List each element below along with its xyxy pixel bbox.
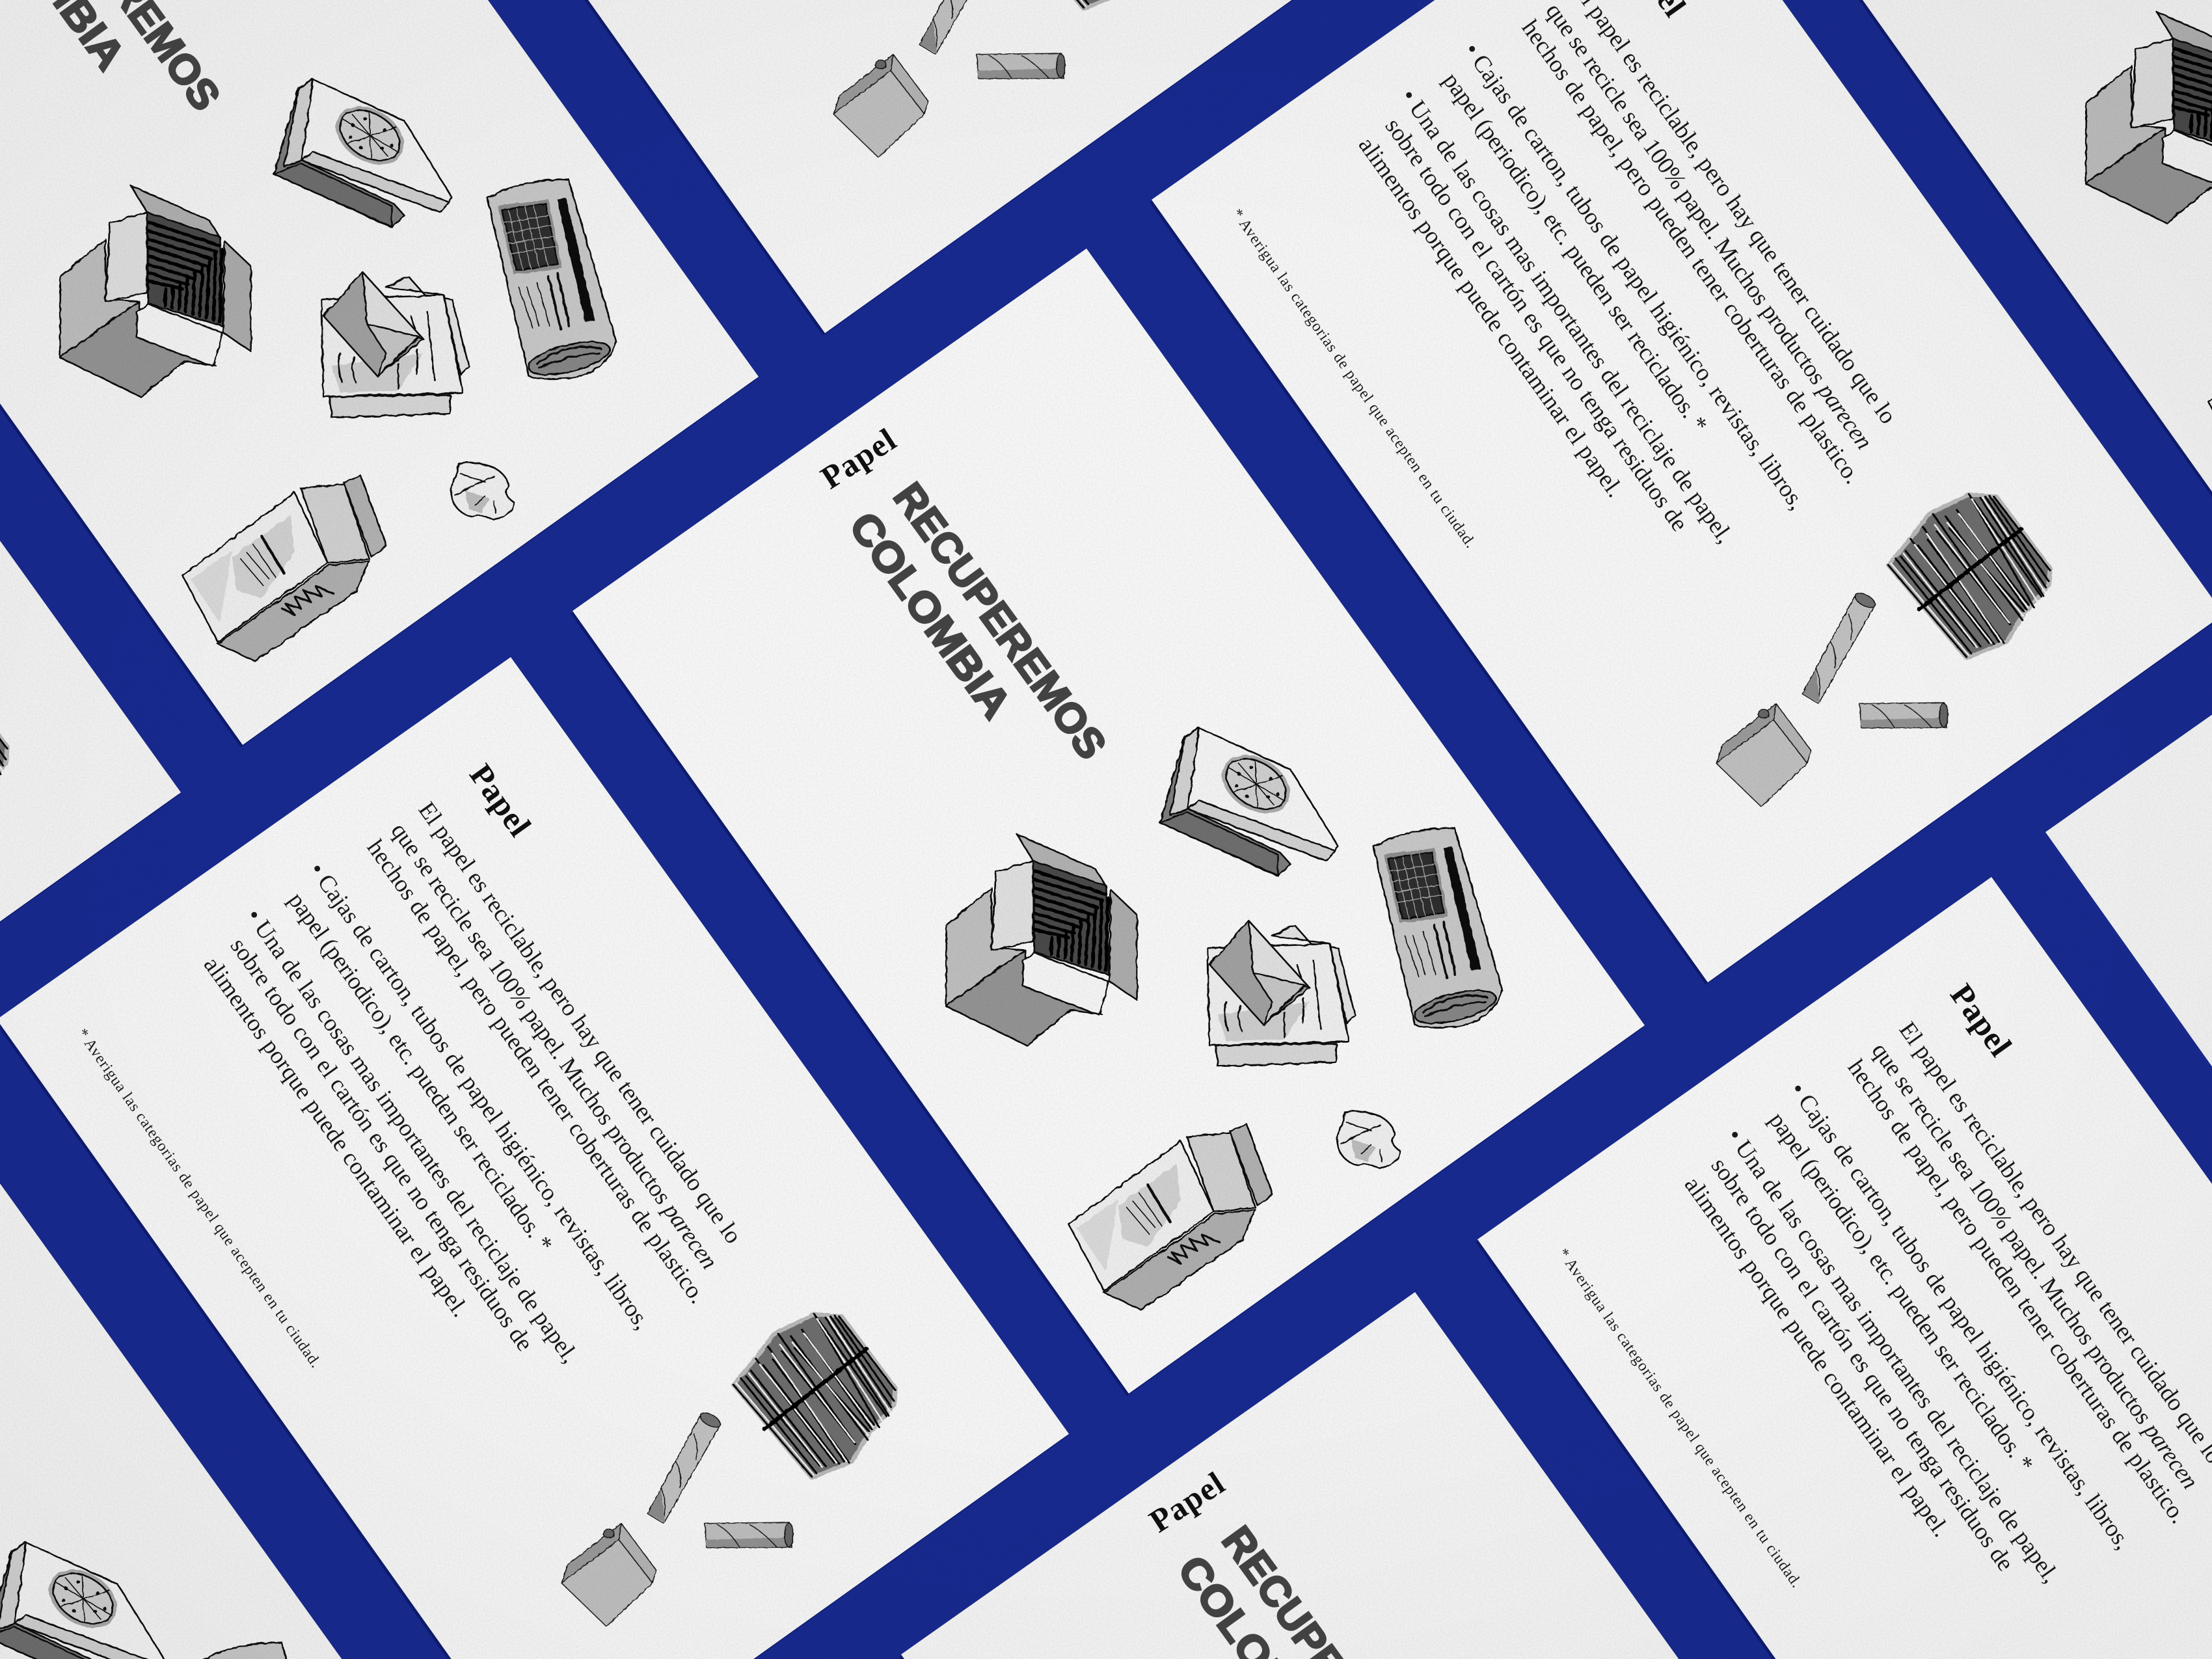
body text: sobre todo con el cartón es que no tenga residuos de	[1380, 113, 1693, 536]
card: top-centre back	[267, 0, 1341, 336]
card: upper-right back	[1150, 0, 2212, 985]
body text	[1353, 0, 1902, 548]
icon: open cardboard box	[946, 834, 1137, 1045]
illustrations: tubes and box	[561, 1314, 895, 1626]
footnote: * Averigua las categorias de papel que acepten en tu ciudad.	[1228, 206, 1479, 551]
paper sheet	[1152, 0, 2212, 982]
card: lower-right back	[1476, 877, 2212, 1659]
card: lower-left front	[0, 1063, 472, 1659]
paper sheet	[901, 1292, 1973, 1659]
title: RECUPEREMOS	[885, 474, 1116, 768]
body text: hechos de papel, pero pueden tener coberturas de plastico.	[1517, 15, 1866, 489]
small heading: Papel	[814, 421, 902, 496]
body text: alimentos porque puede contaminar el papel.	[1679, 1172, 1954, 1542]
heading: Papel	[463, 757, 539, 843]
body text: • Una de las cosas mas importantes del reciclaje de papel,	[1396, 84, 1738, 548]
body text	[198, 797, 747, 1368]
body text: • Cajas de carton, tubos de papel higiénico, revistas, libros,	[1459, 38, 1811, 515]
body text: • Cajas de carton, tubos de papel higiénico, revistas, libros,	[304, 857, 656, 1334]
body text: sobre todo con el cartón es que no tenga residuos de	[1706, 1153, 2019, 1576]
illustrations	[1716, 494, 2050, 807]
icon: crumpled paper	[1337, 1111, 1401, 1168]
paper sheet	[1712, 0, 2212, 571]
card: far-right front	[2045, 470, 2212, 1615]
paper sheet	[0, 16, 181, 1161]
icon: bundle of tubes	[733, 1314, 895, 1478]
icon: pizza box	[1160, 728, 1338, 876]
icon: small carton box	[561, 1524, 656, 1626]
title	[1169, 1518, 1444, 1659]
card: far-left back	[0, 16, 181, 1163]
paper sheet	[0, 1063, 472, 1659]
title: COLOMBIA	[841, 504, 1021, 727]
paper sheet	[1477, 877, 2212, 1659]
icon: milk carton	[1068, 1124, 1273, 1310]
card: upper-right front	[1710, 0, 2212, 574]
body text: • Una de las cosas mas importantes del reciclaje de papel,	[241, 904, 584, 1368]
body text: sobre todo con el cartón es que no tenga residuos de	[225, 933, 538, 1356]
paper sheet	[0, 0, 759, 745]
icon: envelope and letters	[1207, 921, 1355, 1066]
body text: El papel es reciclable, pero hay que tener cuidado que lo	[413, 797, 747, 1248]
illustrations	[2086, 0, 2212, 487]
small heading: Papel	[1142, 1464, 1231, 1539]
icon: rolled newspaper	[1373, 828, 1502, 1030]
card: central front	[571, 249, 1645, 1396]
body text: papel (periodico), etc. pueden ser reciclados. *	[283, 887, 558, 1257]
body text: que se recicle sea 100% papel. Muchos productos parecen	[386, 818, 723, 1275]
icon: short spiral tube	[705, 1522, 793, 1548]
body text: que se recicle sea 100% papel. Muchos productos parecen	[1867, 1038, 2204, 1494]
body text	[1679, 1017, 2212, 1588]
body text: • Cajas de carton, tubos de papel higiénico, revistas, libros,	[1785, 1077, 2137, 1554]
illustrations	[0, 1543, 329, 1659]
body text: hechos de papel, pero pueden tener coberturas de plastico.	[1842, 1055, 2192, 1528]
card: lower-left back	[0, 657, 1069, 1659]
body text: alimentos porque puede contaminar el papel.	[1353, 132, 1628, 502]
illustrations	[60, 79, 616, 661]
body text: alimentos porque puede contaminar el papel.	[198, 952, 474, 1322]
body text: papel (periodico), etc. pueden ser reciclados. *	[1764, 1107, 2038, 1477]
paper sheet	[0, 657, 1069, 1659]
icon: long spiral tube	[647, 1410, 723, 1524]
footnote: * Averigua las categorias de papel que acepten en tu ciudad.	[1554, 1245, 1805, 1591]
illustrations	[833, 0, 1167, 157]
heading: Papel	[1943, 977, 2019, 1063]
body text: que se recicle sea 100% papel. Muchos productos parecen	[1541, 0, 1878, 455]
body text: • Una de las cosas mas importantes del reciclaje de papel,	[1721, 1124, 2064, 1588]
footnote: * Averigua las categorias de papel que acepten en tu ciudad.	[74, 1025, 324, 1371]
card: upper-left front	[0, 0, 759, 748]
body text: papel (periodico), etc. pueden ser reciclados. *	[1438, 68, 1712, 437]
illustrations	[0, 673, 7, 985]
body text: hechos de papel, pero pueden tener coberturas de plastico.	[362, 835, 711, 1308]
paper sheet	[269, 0, 1341, 333]
title	[0, 0, 230, 119]
card: lower-centre front	[899, 1292, 1973, 1659]
illustrations: paper waste	[946, 728, 1502, 1310]
paper sheet	[573, 249, 1645, 1394]
